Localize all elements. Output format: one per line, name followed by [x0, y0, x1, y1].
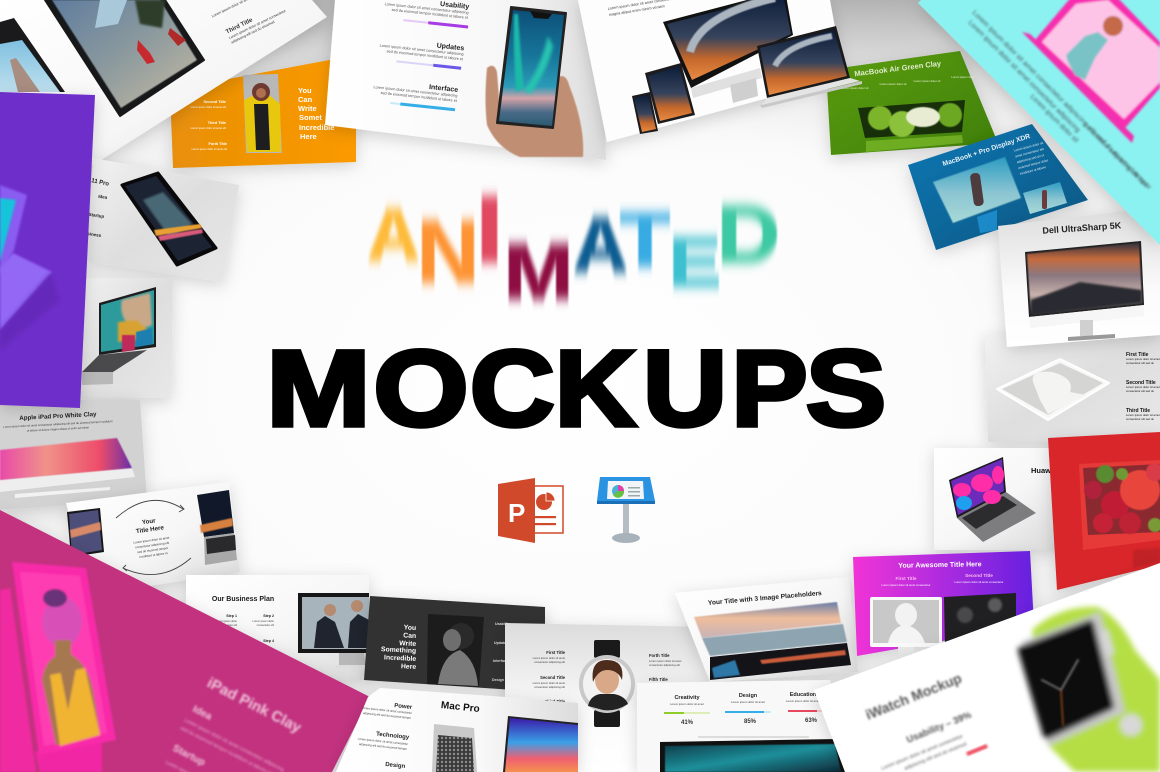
text: list: Interface — [493, 659, 508, 663]
slide: Your Awesome Title Here — [853, 551, 1034, 656]
text: feature labels — [376, 703, 413, 770]
slide: Usability phone in hand — [325, 0, 606, 160]
slide: Our Business Plan: Step 4 — [263, 639, 274, 643]
text: Creativity stat — [664, 695, 710, 726]
slide: left purple blurred — [0, 92, 95, 408]
text: feature labels: Power — [394, 703, 413, 711]
text: blurred pink slide copy: Lorem ipsum dolor sit amet consectetur adipiscing — [183, 717, 285, 772]
heading: ANIMATED motion-blur letters: N — [417, 202, 479, 301]
text: Updates block: Updates — [436, 43, 465, 52]
slide: Your Title Here with arrows — [66, 482, 240, 595]
slide: iPad white gray clay — [985, 330, 1160, 442]
slide: cyan mockup — [918, 0, 1160, 245]
text: blue slide body: amet consectetur elit — [1015, 147, 1044, 158]
slide: Your Awesome Title Here: First Title — [895, 576, 917, 581]
text: Usability block — [383, 0, 470, 28]
text: Design stat — [725, 693, 771, 725]
text: watch left list: Lorem ipsum dolor sit amet — [533, 681, 565, 685]
text: headline: Can — [403, 632, 416, 640]
text: blue slide body: incididunt ut labore — [1019, 165, 1047, 176]
text: orange left list: Third Title — [208, 121, 226, 125]
title: MOCKUPS — [266, 328, 886, 448]
slide: Mac Pro: adipiscing elit sed do eiusmod tempor — [363, 711, 411, 720]
title: MOCKUPS: C — [470, 328, 554, 448]
tablet — [645, 63, 695, 124]
text: headline: Incredible — [384, 654, 416, 663]
slide: Mac Pro: adipiscing elit sed do eiusmod tempor — [359, 742, 407, 751]
heading: ANIMATED motion-blur letters: M — [504, 229, 573, 315]
icon: Keynote — [597, 477, 655, 543]
text: orange headline: Here — [300, 132, 317, 141]
phone: yellow coat portrait — [243, 74, 282, 153]
heading: ANIMATED motion-blur letters — [367, 177, 780, 315]
text: iPad feature list: Third Title — [1126, 408, 1150, 414]
text: watch right list: consectetur adipiscing elit — [649, 663, 680, 667]
text: headline: You — [404, 624, 416, 632]
text: list: Updates — [494, 641, 508, 645]
text: blurred iWatch copy: Usability – 39% — [905, 709, 974, 746]
text: blurred iWatch copy: Lorem ipsum dolor sit amet consectetur — [881, 733, 964, 772]
slide: Your Awesome Title Here: Lorem ipsum dolor sit amet consectetur — [955, 580, 1004, 584]
slide: MacBook Air Green Clay: MacBook Air Green Clay — [854, 59, 942, 78]
text: iPad feature list: First Title — [1126, 352, 1149, 358]
text: feature list: Startup — [88, 212, 105, 219]
text: title and body: Title Here — [136, 524, 165, 535]
text: green slide columns: Lorem ipsum dolor sit — [914, 79, 941, 83]
heading: ANIMATED motion-blur letters: T — [620, 198, 670, 283]
slide: MacBook + Pro Display XDR: MacBook + Pro Display XDR — [942, 133, 1031, 168]
dark tablet with teal art — [660, 736, 845, 772]
title: MOCKUPS: U — [643, 328, 727, 448]
text: title and body: Your — [142, 517, 157, 526]
text: list: Usability — [495, 622, 510, 626]
arrows — [116, 500, 191, 575]
icon: PowerPoint: P — [508, 498, 525, 528]
slide: Apple iPad Pro White Clay — [0, 400, 147, 510]
text: blurred pink slide copy: Startup — [171, 743, 207, 769]
slide: MacBook colourful screen — [78, 278, 173, 398]
text: orange left list: Lorem ipsum dolor sit amet elit — [191, 105, 226, 109]
slide: MacBook + Pro Display XDR — [908, 124, 1088, 250]
text: iPad feature list — [1126, 352, 1160, 421]
title: MOCKUPS: O — [374, 328, 468, 448]
slide: Mac Pro: Lorem ipsum dolor sit amet consectetur — [358, 737, 408, 746]
title: MOCKUPS: S — [806, 328, 886, 448]
white iMac image — [870, 597, 942, 655]
text: Creativity stat: Creativity — [674, 695, 700, 701]
slide: Our Business Plan — [186, 575, 369, 680]
text: iPad feature list: consectetur elit sed do — [1126, 389, 1154, 393]
slide: Dell UltraSharp 5K: Dell UltraSharp 5K — [1042, 220, 1122, 236]
slide: Mac Pro: Mac Pro — [440, 700, 480, 715]
slide: Creativity Design Education — [637, 680, 860, 772]
watch hands — [1042, 660, 1078, 725]
text: Updates block: sed do eiusmod tempor incididunt ut labore et — [386, 49, 464, 61]
text: watch right list: Fifth Title — [649, 677, 668, 682]
text: Third Title — [211, 0, 289, 47]
text: blue slide body: Lorem ipsum dolor sit — [1013, 141, 1044, 153]
text: green slide columns — [842, 75, 975, 90]
text: list — [492, 622, 510, 682]
laptop isometric — [949, 457, 1036, 542]
text: iPad feature list: Lorem ipsum dolor sit amet — [1126, 385, 1160, 389]
text: title and body: incididunt ut labore et — [139, 551, 168, 559]
laptop image — [197, 490, 237, 565]
text: orange headline: Somet — [299, 113, 322, 122]
text: iPad feature list: Lorem ipsum dolor sit amet — [1126, 357, 1160, 361]
slide: watch with portrait — [505, 623, 710, 772]
pink laptop — [1022, 0, 1160, 143]
text: blurred iWatch copy: iWatch Mockup — [863, 670, 964, 723]
text: feature list: Business — [81, 230, 102, 238]
strawberries — [1084, 463, 1160, 534]
blurred red bar — [966, 744, 988, 756]
slide: Our Business Plan: consectetur elit — [220, 623, 237, 627]
icon: PowerPoint — [498, 478, 563, 543]
text: orange headline: Write — [298, 104, 317, 113]
laptop — [757, 26, 862, 108]
text: feature list: Idea — [98, 194, 108, 200]
slide: Your Awesome Title Here: Lorem ipsum dolor sit amet consectetur — [882, 583, 931, 587]
heading: ANIMATED motion-blur letters: A — [367, 195, 420, 276]
slide: Mac Pro: Lorem ipsum dolor sit amet consectetur — [362, 706, 412, 715]
slide: Apple iPad Pro White Clay: ut labore et dolore magna aliqua ut enim ad minim — [27, 425, 90, 433]
text: watch right list — [649, 653, 682, 682]
slide: Our Business Plan: Lorem ipsum dolor — [216, 619, 237, 623]
text: headline: Something — [381, 646, 416, 655]
text: cyan slide blurred body: Lorem ipsum dolor sit amet consectetur adipiscing — [967, 19, 1081, 134]
text: watch left list: Third Title — [545, 699, 566, 704]
text: blue slide body: adipiscing sed do ut — [1016, 153, 1045, 164]
text: Interface block — [372, 78, 459, 111]
text: orange left list — [191, 100, 227, 151]
text: Updates block: Lorem ipsum dolor sit amet consectetur adipiscing — [379, 44, 464, 56]
text: blurred pink slide copy: iPad Pink Clay — [204, 674, 305, 737]
text: headline — [381, 624, 416, 671]
text: green slide columns: Lorem ipsum dolor — [951, 75, 975, 79]
text: Education stat: Education — [790, 692, 817, 698]
title: MOCKUPS: M — [266, 328, 370, 448]
slide: iPhone 11 Pro: 11 Pro — [91, 178, 110, 188]
iPhone — [122, 173, 216, 265]
text: Interface block: Interface — [429, 84, 459, 94]
text: blue slide body — [1013, 141, 1051, 176]
iMac — [663, 0, 793, 103]
text: Creativity stat: Lorem ipsum dolor sit amet — [670, 702, 704, 706]
slide: Your Awesome Title Here: Your Awesome Title Here — [898, 561, 982, 570]
text: title and body: sed do eiusmod tempor — [137, 546, 169, 554]
text: iPad feature list: Lorem ipsum dolor sit amet — [1126, 413, 1160, 417]
heading: ANIMATED motion-blur letters: A — [573, 203, 628, 288]
slide: dark You Can Write Something — [364, 596, 545, 692]
watch — [579, 640, 635, 727]
text: headline: Write — [399, 640, 416, 648]
text: watch left list: consectetur adipiscing elit — [534, 660, 565, 664]
text: cyan slide blurred body: consectetur adipiscing elit sed — [1082, 121, 1149, 189]
slide: Your Awesome Title Here: Second Title — [965, 573, 993, 578]
text: orange headline: Can — [298, 95, 313, 104]
slide: Huawei laptop: Huawei — [1031, 466, 1057, 475]
slide: Huawei laptop — [934, 448, 1060, 550]
slide: Dell UltraSharp 5K — [998, 207, 1160, 347]
text: blue slide body: eiusmod tempor dolor — [1018, 158, 1050, 170]
slide: orange You Can Write — [170, 55, 356, 168]
dark flat lay image — [944, 593, 1016, 648]
heading: ANIMATED motion-blur letters: I — [476, 177, 503, 283]
text: feature labels: Technology — [376, 732, 410, 741]
colourful screen — [503, 716, 578, 772]
slide: Our Business Plan: Step 2 — [263, 614, 274, 618]
text: Design stat: Lorem ipsum dolor sit amet — [731, 700, 765, 704]
title: MOCKUPS: K — [555, 328, 636, 448]
text: orange left list: Lorem ipsum dolor sit amet elit — [191, 126, 226, 130]
text: green slide columns: Lorem ipsum dolor sit — [880, 82, 907, 86]
layered images — [694, 602, 851, 680]
slide: top-left tablet and phone — [0, 0, 327, 175]
text: cyan slide blurred body: Lorem ipsum dolor sit — [1029, 93, 1080, 144]
text: headline: Here — [401, 663, 416, 671]
heading: ANIMATED motion-blur letters: E — [669, 223, 721, 301]
pink tablet with model — [0, 562, 116, 772]
text: watch left list: Second Title — [540, 675, 566, 680]
text: Usability block: Usability — [440, 1, 470, 11]
text: orange headline: Incredible — [299, 123, 334, 132]
title: MOCKUPS: P — [732, 328, 808, 448]
tablet image — [67, 508, 104, 557]
text: title and body: Lorem ipsum dolor sit amet — [133, 536, 170, 545]
text: watch left list: Lorem ipsum dolor sit amet — [533, 656, 565, 660]
text: feature labels: Design — [385, 762, 406, 770]
slide: Your Title with 3 Image Placeholders: Your Title with 3 Image Placeholders — [708, 590, 822, 607]
text: watch right list: Forth Title — [649, 653, 670, 658]
heading: ANIMATED motion-blur letters: D — [717, 190, 780, 280]
text: Education stat: 63% — [805, 718, 818, 724]
slide: red strawberries — [1048, 432, 1160, 590]
text: Education stat — [786, 692, 834, 724]
slide: Our Business Plan: Step 1 — [226, 614, 237, 618]
text: Updates block — [378, 37, 465, 70]
text: Third Title: Lorem ipsum dolor sit amet consectetur — [228, 8, 287, 40]
text: orange left list: Lorem ipsum dolor sit amet elit — [192, 147, 227, 151]
text: orange left list: Second Title — [203, 100, 226, 104]
slide: MacBook Air Green Clay — [826, 51, 998, 155]
text: watch left list: consectetur adipiscing elit — [534, 685, 565, 689]
text: Usability block: sed do eiusmod tempor incididunt ut labore et — [391, 8, 469, 20]
text: feature list — [81, 194, 108, 238]
slide: Mac Pro — [336, 688, 578, 772]
text: Third Title: adipiscing elit sed do eiusmod — [230, 20, 275, 44]
text: iPad feature list: Second Title — [1126, 380, 1156, 386]
text: blurred iWatch copy: adipiscing elit sed do eiusmod — [904, 741, 968, 772]
text: orange headline: You — [298, 86, 312, 95]
text: Usability block: Lorem ipsum dolor sit amet consectetur adipiscing — [384, 2, 469, 15]
phone — [0, 18, 65, 92]
text: Design stat: 85% — [744, 719, 757, 725]
phone — [632, 92, 658, 134]
slide: Our Business Plan: Our Business Plan — [212, 596, 274, 603]
text: Design stat: Design — [739, 693, 758, 699]
Mac Pro tower — [432, 724, 477, 772]
slide: iWatch Mockup — [814, 563, 1160, 772]
monitor with two men — [298, 593, 369, 668]
portrait — [427, 614, 484, 687]
slide: iPhone 11 Pro — [81, 158, 239, 282]
slide: Your Title with 3 Image Placeholders — [675, 577, 858, 682]
text: green slide columns: Lorem ipsum dolor sit — [842, 86, 869, 90]
text: blurred iWatch copy — [863, 670, 974, 772]
text: blurred pink slide copy: Idea — [191, 704, 214, 723]
hand holding phone — [486, 7, 583, 157]
slide: Apple iPad Pro White Clay: Apple iPad Pro White Clay — [19, 411, 97, 422]
text: list: Design — [492, 678, 504, 682]
text: watch left list: First Title — [546, 650, 566, 655]
text: Interface block: Lorem ipsum dolor sit amet consectetur adipiscing — [373, 85, 458, 98]
text: Creativity stat: 41% — [681, 720, 694, 726]
slide: devices iMac laptop tablet phone — [578, 0, 862, 142]
slide: Our Business Plan: consectetur elit — [257, 623, 274, 627]
slide: devices iMac laptop tablet phone: magna aliqua enim minim veniam — [609, 4, 665, 17]
text: orange left list: Forth Title — [208, 142, 227, 146]
Apple Watch green — [1022, 607, 1160, 772]
text: watch left list — [533, 650, 566, 704]
text: watch right list: Lorem ipsum dolor sit amet — [649, 659, 682, 663]
text: title and body: consectetur adipiscing elit — [135, 541, 170, 550]
text: title and body — [130, 516, 172, 560]
text: iPad feature list: consectetur elit sed do — [1126, 361, 1154, 365]
text: orange headline — [298, 86, 334, 141]
slide: Our Business Plan: Lorem ipsum dolor — [253, 619, 274, 623]
text: iPad feature list: consectetur elit sed do — [1126, 417, 1154, 421]
slide: Apple iPad Pro White Clay: Lorem ipsum dolor sit amet consectetur adipiscing elit sed do eiusmod tempor incididunt — [3, 419, 113, 429]
text: Education stat: Lorem ipsum dolor sit amet — [786, 699, 820, 703]
text: cyan slide blurred body: Lorem ipsum dolor sit amet consectetur adipiscing elit sed do eiusmod tempor — [971, 9, 1153, 192]
text: blurred pink slide copy — [164, 674, 305, 772]
text: Third Title: Third Title — [225, 17, 254, 36]
slide: pink iPad Pink Clay — [0, 510, 370, 772]
text: Interface block: sed do eiusmod tempor incididunt ut labore et — [380, 91, 458, 103]
tablet — [45, 0, 204, 116]
